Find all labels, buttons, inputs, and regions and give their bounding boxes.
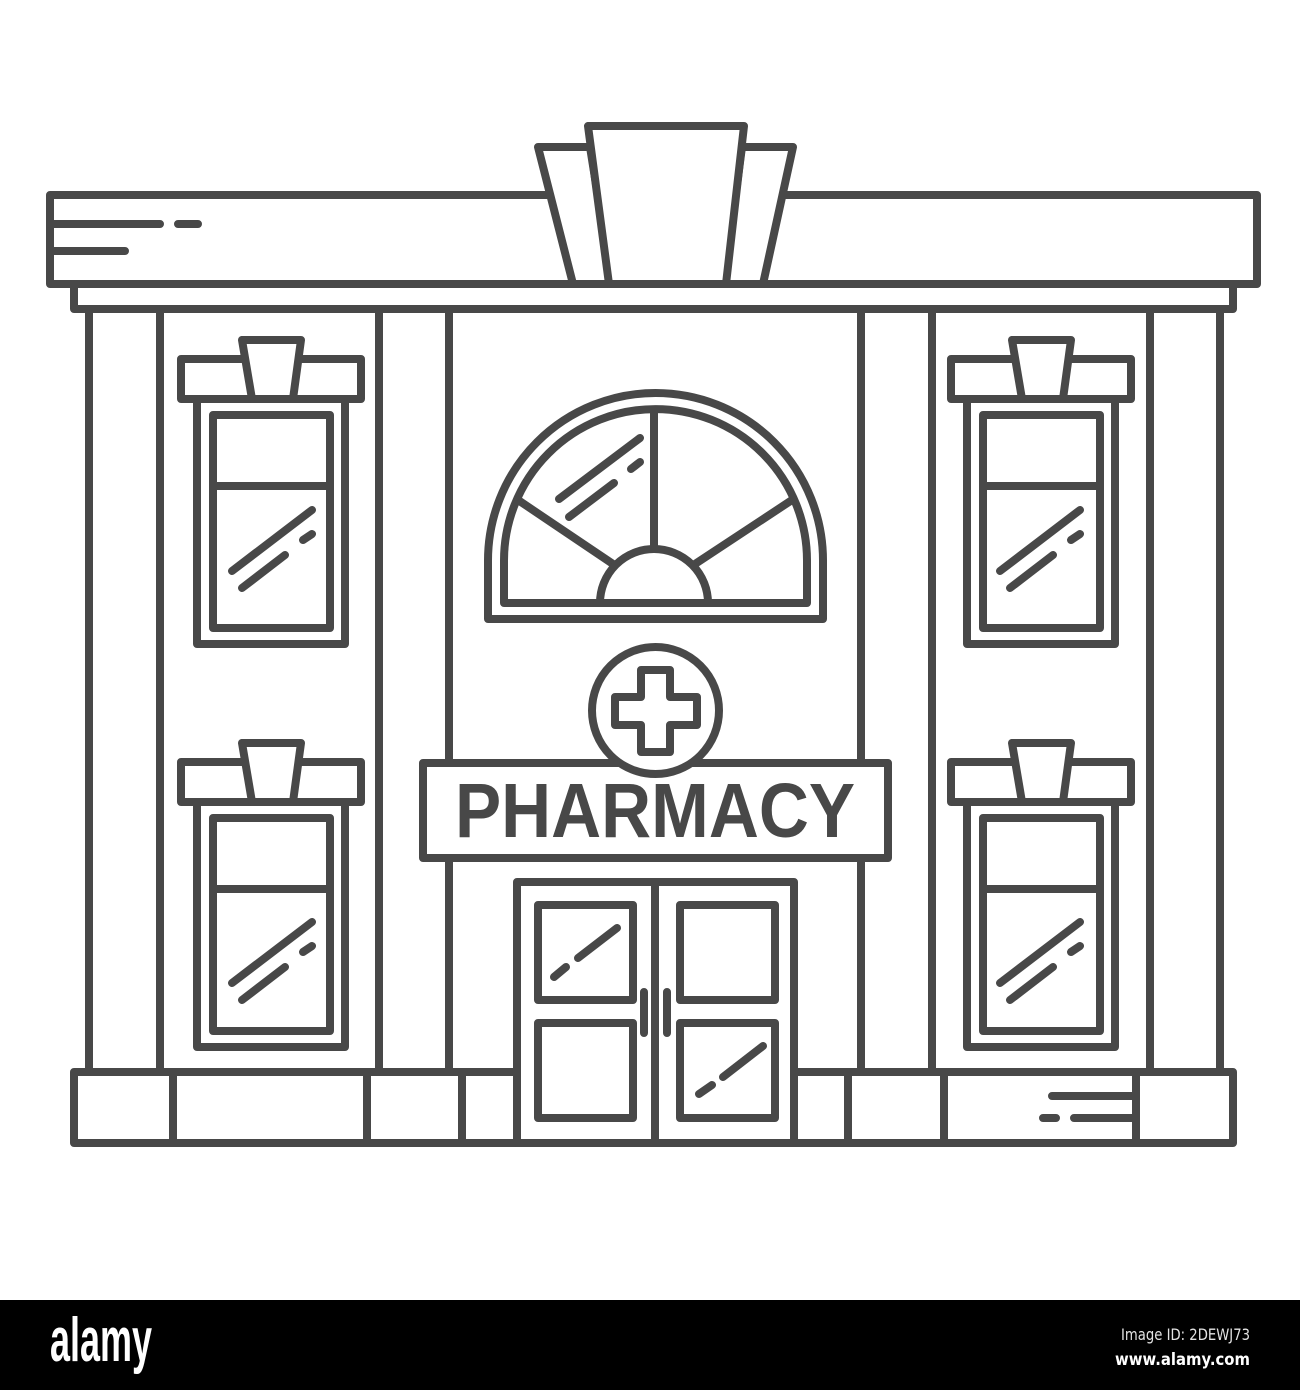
window: upper right [951, 340, 1131, 644]
pharmacy sign board [423, 763, 888, 858]
window: upper left [181, 340, 361, 644]
roof slab [50, 195, 1257, 284]
roof crown ornament [538, 126, 793, 284]
footer logo: alamy [50, 1306, 152, 1375]
website: www.alamy.com [1115, 1350, 1250, 1370]
footer bar [0, 1300, 1300, 1390]
image id: Image ID: 2DEWJ73 [1121, 1325, 1250, 1344]
medical cross badge [592, 647, 719, 774]
arched fanlight window [488, 393, 823, 619]
window: lower right [951, 743, 1131, 1047]
double entrance door [517, 882, 794, 1143]
sign text: PHARMACY [455, 768, 855, 854]
building columns [89, 309, 1220, 1072]
window: lower left [181, 743, 361, 1047]
plinth base [74, 1072, 1233, 1143]
building [50, 126, 1257, 1143]
lower roof band [74, 284, 1233, 309]
